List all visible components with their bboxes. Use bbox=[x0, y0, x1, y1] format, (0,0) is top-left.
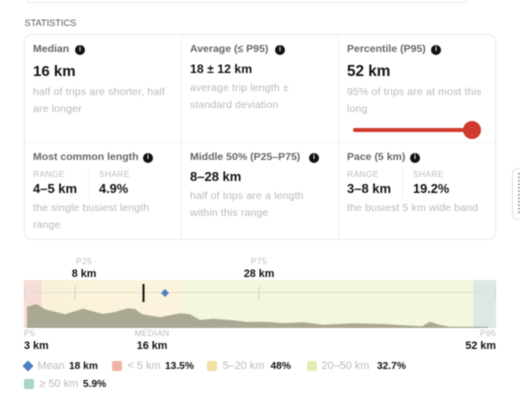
label: median: MEDIAN bbox=[135, 328, 169, 338]
label: P25: 8 km bbox=[72, 268, 96, 280]
stat: percentile P95 bbox=[346, 43, 482, 140]
legend: 5 to 20 km: 5–20 km bbox=[222, 360, 264, 372]
legend: 20 to 50 km: 20–50 km bbox=[322, 360, 369, 372]
stat: average bbox=[190, 43, 289, 111]
stat: median: 16 km bbox=[33, 63, 76, 80]
stat: pace 5 km: the busiest 5 km wide band bbox=[347, 202, 478, 214]
label: P75: P75 bbox=[251, 256, 267, 266]
panel: statistics grid bbox=[24, 34, 496, 240]
legend: mean bbox=[22, 360, 98, 372]
label: P5: 3 km bbox=[24, 340, 49, 352]
percentile slider bbox=[352, 120, 482, 140]
previous panel bottom edge bbox=[25, 0, 468, 3]
stat: most common length: 4.9% bbox=[99, 181, 128, 196]
label: P25 bbox=[71, 256, 96, 280]
median marker bbox=[142, 284, 144, 302]
mean marker bbox=[161, 289, 169, 297]
stat: average: standard deviation bbox=[190, 99, 279, 111]
legend: over 50 km bbox=[24, 378, 107, 390]
stat: percentile P95: i bbox=[435, 46, 437, 53]
side handle bbox=[512, 168, 520, 220]
legend: under 5 km: < 5 km bbox=[128, 360, 160, 372]
stat: middle 50%: i bbox=[313, 154, 315, 161]
stat: percentile P95: Percentile (P95) bbox=[347, 43, 426, 55]
stat: average: Average (≤ P95) bbox=[190, 43, 268, 55]
stat: percentile P95: 52 km bbox=[347, 63, 390, 80]
stat: middle 50%: within this range bbox=[190, 207, 268, 219]
stat: most common length: the single busiest length bbox=[33, 202, 149, 214]
stat: average: average trip length ± bbox=[190, 82, 289, 94]
stat: average: 18 ± 12 km bbox=[190, 62, 252, 76]
stat: most common length: Most common length bbox=[33, 151, 139, 163]
stat: middle 50%: 8–28 km bbox=[190, 169, 241, 184]
heading: statistics: STATISTICS bbox=[24, 18, 76, 28]
legend: 5 to 20 km bbox=[206, 360, 292, 372]
stat: percentile P95: long bbox=[347, 103, 367, 115]
stat: pace 5 km: Pace (5 km) bbox=[347, 151, 405, 163]
label: P5 bbox=[24, 328, 49, 352]
stat: median: i bbox=[79, 46, 81, 53]
area: trip length density bbox=[27, 304, 488, 328]
stat: median: are longer bbox=[33, 103, 82, 115]
stat: pace 5 km: i bbox=[414, 154, 416, 161]
legend: 20 to 50 km: 32.7% bbox=[377, 361, 406, 372]
label: median bbox=[134, 328, 169, 352]
label: median: 16 km bbox=[137, 340, 167, 352]
stat: pace 5 km: 3–8 km bbox=[347, 181, 391, 196]
stat: most common length: SHARE bbox=[99, 169, 130, 179]
stat: pace 5 km bbox=[346, 151, 478, 214]
stat: most common length bbox=[32, 151, 154, 231]
legend: over 50 km: ≥ 50 km bbox=[40, 378, 78, 390]
legend: over 50 km: 5.9% bbox=[83, 379, 106, 390]
legend: under 5 km bbox=[112, 360, 194, 372]
stat: median: half of trips are shorter, half bbox=[33, 86, 165, 98]
stat: median: Median bbox=[33, 43, 69, 55]
stat: middle 50% bbox=[190, 151, 320, 219]
stat: most common length: RANGE bbox=[33, 169, 65, 179]
legend: 5 to 20 km: 48% bbox=[270, 361, 291, 372]
label: P75: 28 km bbox=[244, 268, 274, 280]
stat: pace 5 km: 19.2% bbox=[413, 181, 449, 196]
label: P95: 52 km bbox=[465, 340, 496, 352]
legend: mean: 18 km bbox=[69, 361, 98, 372]
stat: most common length: i bbox=[147, 154, 149, 161]
stat: pace 5 km: RANGE bbox=[347, 169, 379, 179]
stat: most common length: 4–5 km bbox=[33, 181, 77, 196]
stat: middle 50%: half of trips are a length bbox=[190, 190, 304, 202]
label: P75 bbox=[243, 256, 274, 280]
label: P95: P95 bbox=[480, 328, 496, 338]
label: P25: P25 bbox=[76, 256, 92, 266]
stat: average: i bbox=[279, 46, 281, 53]
stat: percentile P95: 95% of trips are at most this bbox=[347, 86, 482, 98]
legend: under 5 km: 13.5% bbox=[165, 361, 194, 372]
legend: 20 to 50 km bbox=[306, 360, 406, 372]
stat: most common length: range bbox=[33, 219, 61, 231]
label: P5: P5 bbox=[24, 328, 35, 338]
label: P95 bbox=[465, 328, 496, 352]
stat: median bbox=[33, 43, 165, 115]
stat: pace 5 km: SHARE bbox=[413, 169, 444, 179]
legend: mean: Mean bbox=[38, 360, 65, 372]
legend bbox=[22, 360, 406, 390]
stat: middle 50%: Middle 50% (P25–P75) bbox=[190, 151, 300, 163]
